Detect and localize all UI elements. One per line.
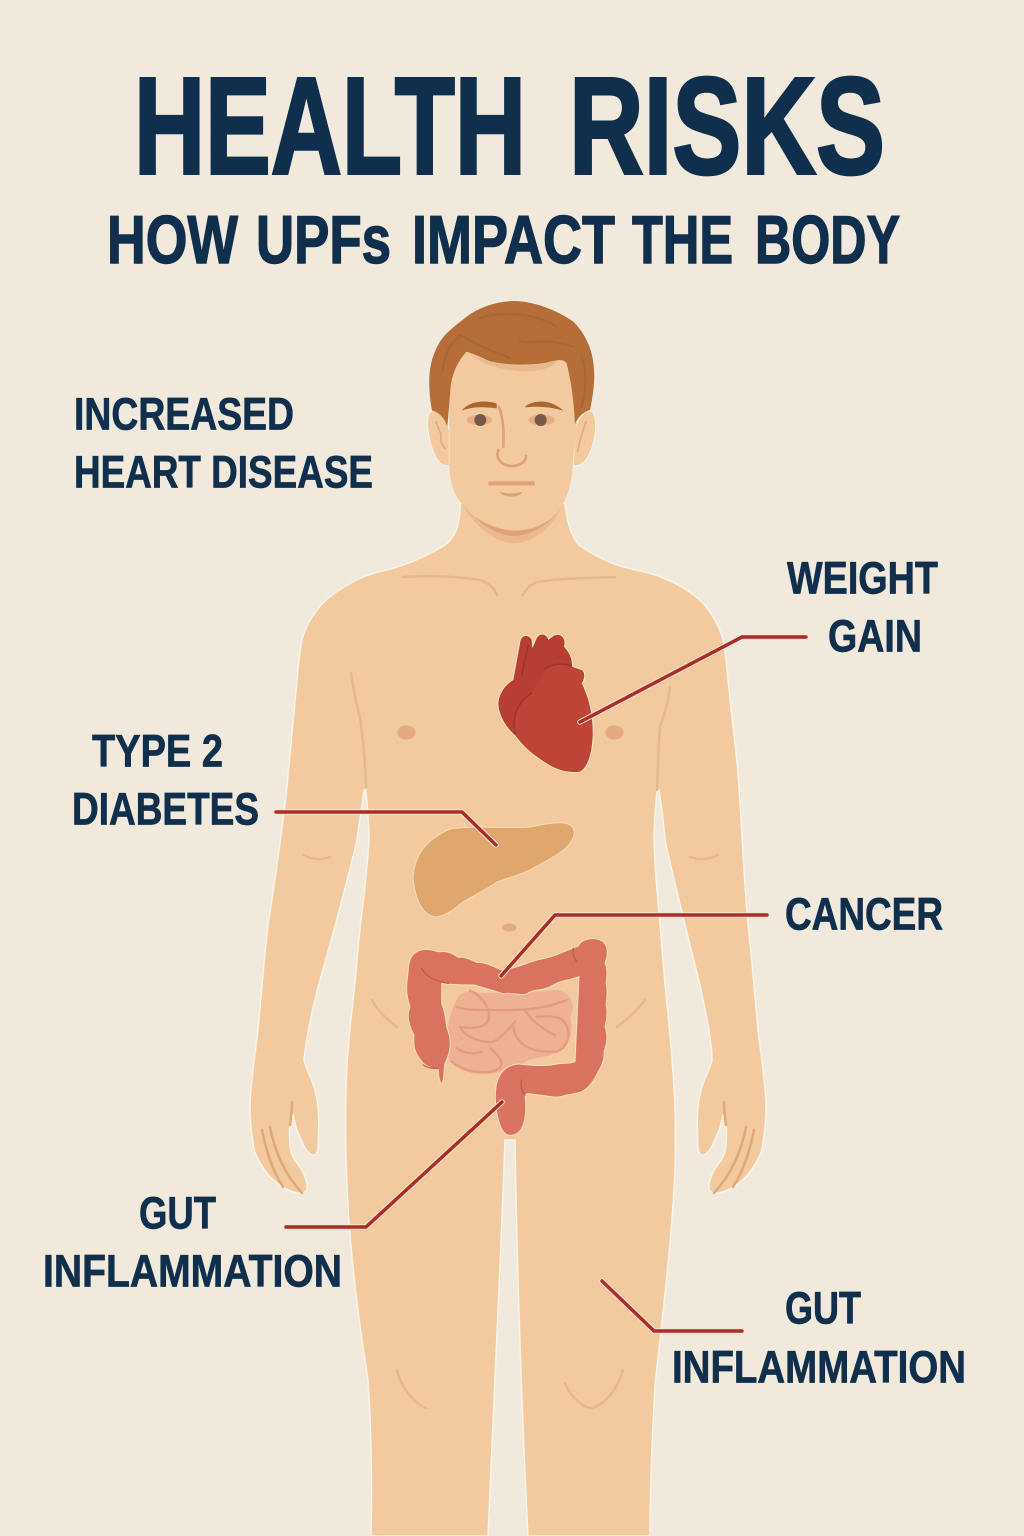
label: gut inflammation left: INFLAMMATION [43,1246,342,1296]
heart ventricle [514,665,593,772]
title: RISKS [569,50,885,204]
label: type 2 diabetes: DIABETES [72,784,259,834]
callout lines [276,637,806,1331]
label: gut inflammation right: GUT [785,1282,861,1334]
subtitle [107,202,900,278]
label: increased heart disease [74,388,373,498]
eyes [467,414,555,426]
colon folds [422,948,577,1095]
hair strands [443,314,585,407]
face [448,347,577,531]
nipples and navel [398,726,624,932]
heart back chambers [498,634,572,735]
small intestine [446,990,573,1074]
subtitle: IMPACT [412,202,615,278]
large intestine [407,939,607,1135]
line: type 2 diabetes [276,812,496,845]
chest and limb details [304,576,718,1408]
subtitle: THE [632,202,733,278]
label: type 2 diabetes: TYPE 2 [92,726,223,776]
body silhouette [250,503,766,1536]
eyebrows [462,401,563,411]
subtitle: BODY [755,202,900,278]
inner ear marks [436,422,586,452]
nose [498,407,526,466]
title: HEALTH [134,50,526,204]
line: gut inflammation right [602,1281,742,1331]
label: weight gain: GAIN [828,610,922,662]
heart halo [498,634,593,772]
line: weight gain [580,637,806,722]
ears [428,411,596,466]
human body figure [250,301,766,1536]
label: gut inflammation left [43,1188,342,1296]
finger lines [262,1102,754,1193]
head [428,301,596,543]
mouth [488,481,535,497]
icon: intestines [407,939,607,1135]
line: gut inflammation left [286,1102,502,1227]
subtitle: UPFs [256,202,391,278]
hair [429,301,594,427]
label: cancer: CANCER [785,888,943,940]
line: cancer [501,915,767,976]
subtitle: HOW [107,202,239,278]
label: weight gain: WEIGHT [787,552,938,604]
forehead shadow [468,353,557,371]
label: increased heart disease: INCREASED [74,388,294,440]
icon: heart [498,634,593,772]
neck shadow [462,503,562,543]
label: gut inflammation left: GUT [139,1188,216,1238]
label: increased heart disease: HEART DISEASE [74,446,373,498]
icon: liver [413,823,574,917]
label: gut inflammation right [672,1282,966,1392]
label: type 2 diabetes [72,726,259,834]
heart folds [514,645,572,733]
label: gut inflammation right: INFLAMMATION [672,1342,966,1392]
label: weight gain [787,552,938,662]
